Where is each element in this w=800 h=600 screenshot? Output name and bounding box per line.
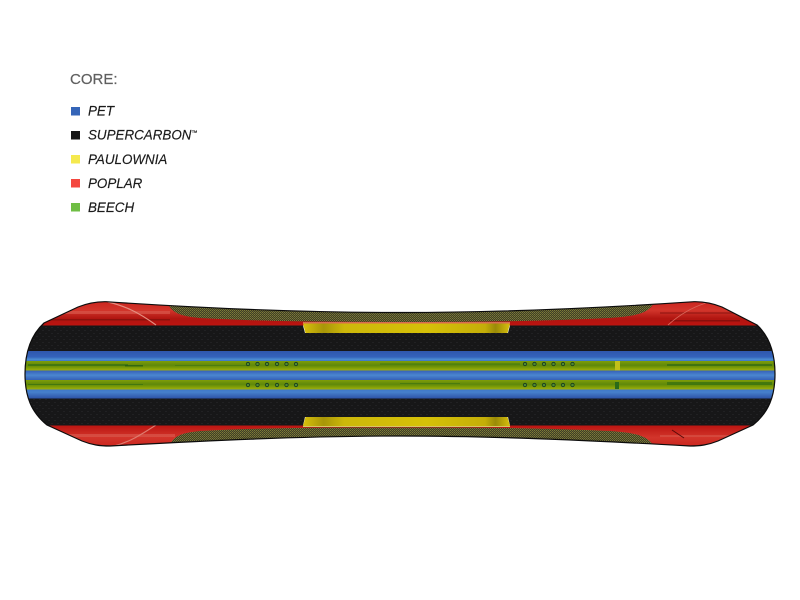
snowboard core cross-section — [20, 298, 780, 450]
PET: blue stringer 3 — [20, 390, 780, 398]
insert holes — [246, 362, 574, 387]
paulownia: top insert — [303, 322, 510, 333]
supercarbon: bottom band — [20, 398, 780, 426]
legend item: BEECH: BEECH — [88, 200, 134, 215]
heading: CORE: CORE: — [70, 71, 118, 88]
poplar: bottom edge — [50, 425, 750, 446]
supercarbon: top olive edge — [169, 304, 653, 322]
PET: blue stringer 1 — [20, 351, 780, 361]
legend item: SUPERCARBON: ™ — [191, 130, 197, 136]
legend item: PET: PET — [88, 104, 115, 118]
paulownia: bottom insert — [303, 417, 510, 427]
beech: green stringer 2 — [20, 380, 780, 390]
legend: core materials — [70, 71, 197, 215]
PET: blue stringer 2 — [20, 370, 780, 380]
legend item: POPLAR: POPLAR — [88, 176, 143, 191]
legend item: PAULOWNIA: PAULOWNIA — [88, 152, 167, 167]
supercarbon: top band — [20, 326, 780, 351]
legend item: PET — [71, 104, 115, 118]
legend item: SUPERCARBON: SUPERCARBON — [88, 128, 191, 142]
supercarbon: bottom olive edge — [171, 428, 652, 444]
beech: green stringer 1 — [20, 361, 780, 370]
poplar: top edge — [42, 302, 757, 326]
board outline — [25, 302, 775, 446]
